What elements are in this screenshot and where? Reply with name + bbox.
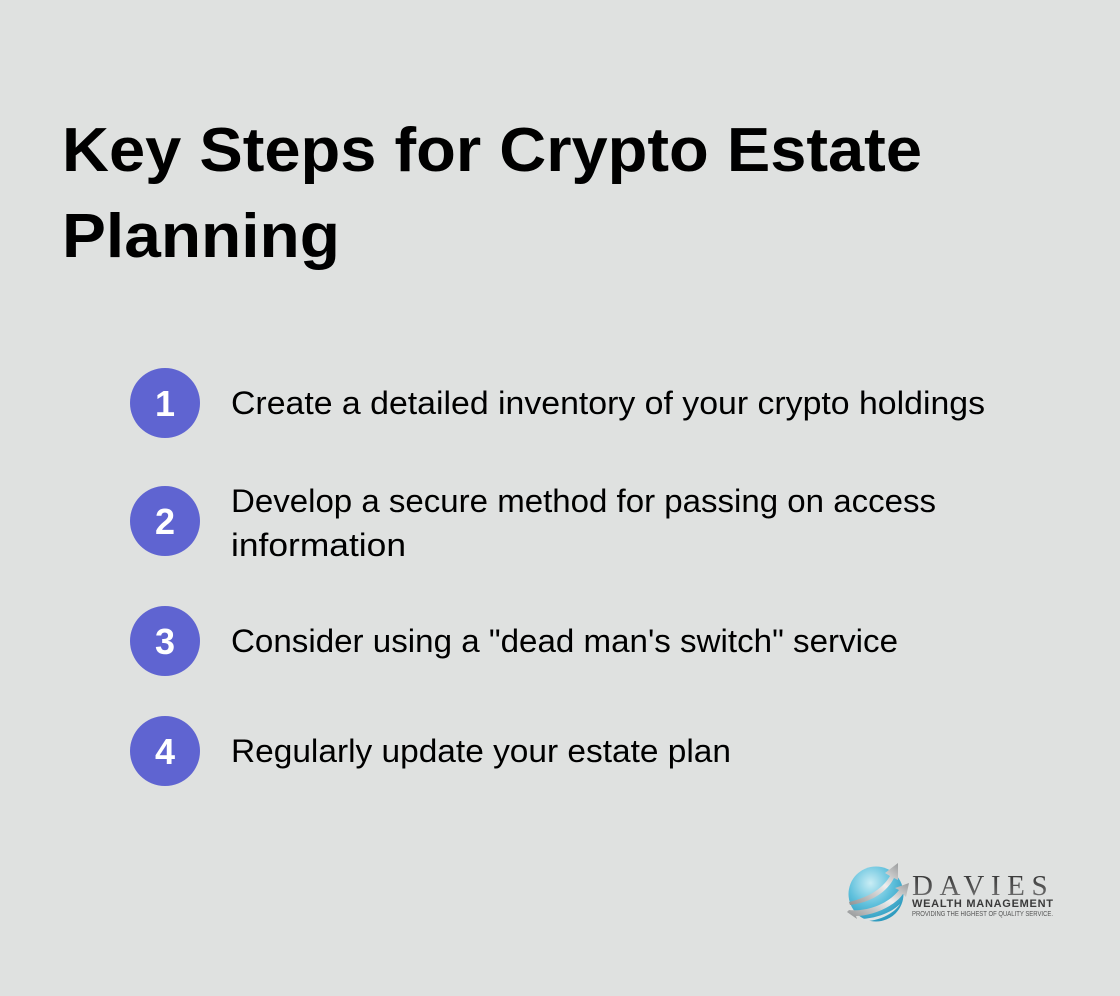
logo wordmark: DAVIES xyxy=(912,870,1054,902)
logo: Davies Wealth Management xyxy=(847,863,1054,922)
step 2 text: Develop a secure method for passing on access xyxy=(231,483,936,519)
step 1 badge: 1 xyxy=(155,383,175,424)
step 3 xyxy=(130,606,898,676)
title xyxy=(62,116,922,271)
step 1 xyxy=(130,368,985,438)
step 2 text: information xyxy=(231,527,406,563)
step 3 badge: 3 xyxy=(155,621,175,662)
step 3 badge xyxy=(130,606,200,676)
icon: globe with arrows xyxy=(847,863,909,922)
title: Key Steps for Crypto Estate xyxy=(62,116,922,185)
step 2 badge: 2 xyxy=(155,501,175,542)
logo tagline: PROVIDING THE HIGHEST OF QUALITY SERVICE. xyxy=(912,911,1053,918)
logo subtitle: WEALTH MANAGEMENT xyxy=(912,898,1053,910)
step 4 badge xyxy=(130,716,200,786)
step 2 badge xyxy=(130,486,200,556)
step 1 badge xyxy=(130,368,200,438)
step 4 text: Regularly update your estate plan xyxy=(231,733,731,769)
title: Planning xyxy=(62,202,340,271)
step 3 text: Consider using a "dead man's switch" service xyxy=(231,623,898,659)
step 4 badge: 4 xyxy=(155,731,175,772)
step 2 text xyxy=(231,483,936,563)
step 2 xyxy=(130,483,936,563)
step 1 text: Create a detailed inventory of your crypto holdings xyxy=(231,385,985,421)
step 4 xyxy=(130,716,731,786)
